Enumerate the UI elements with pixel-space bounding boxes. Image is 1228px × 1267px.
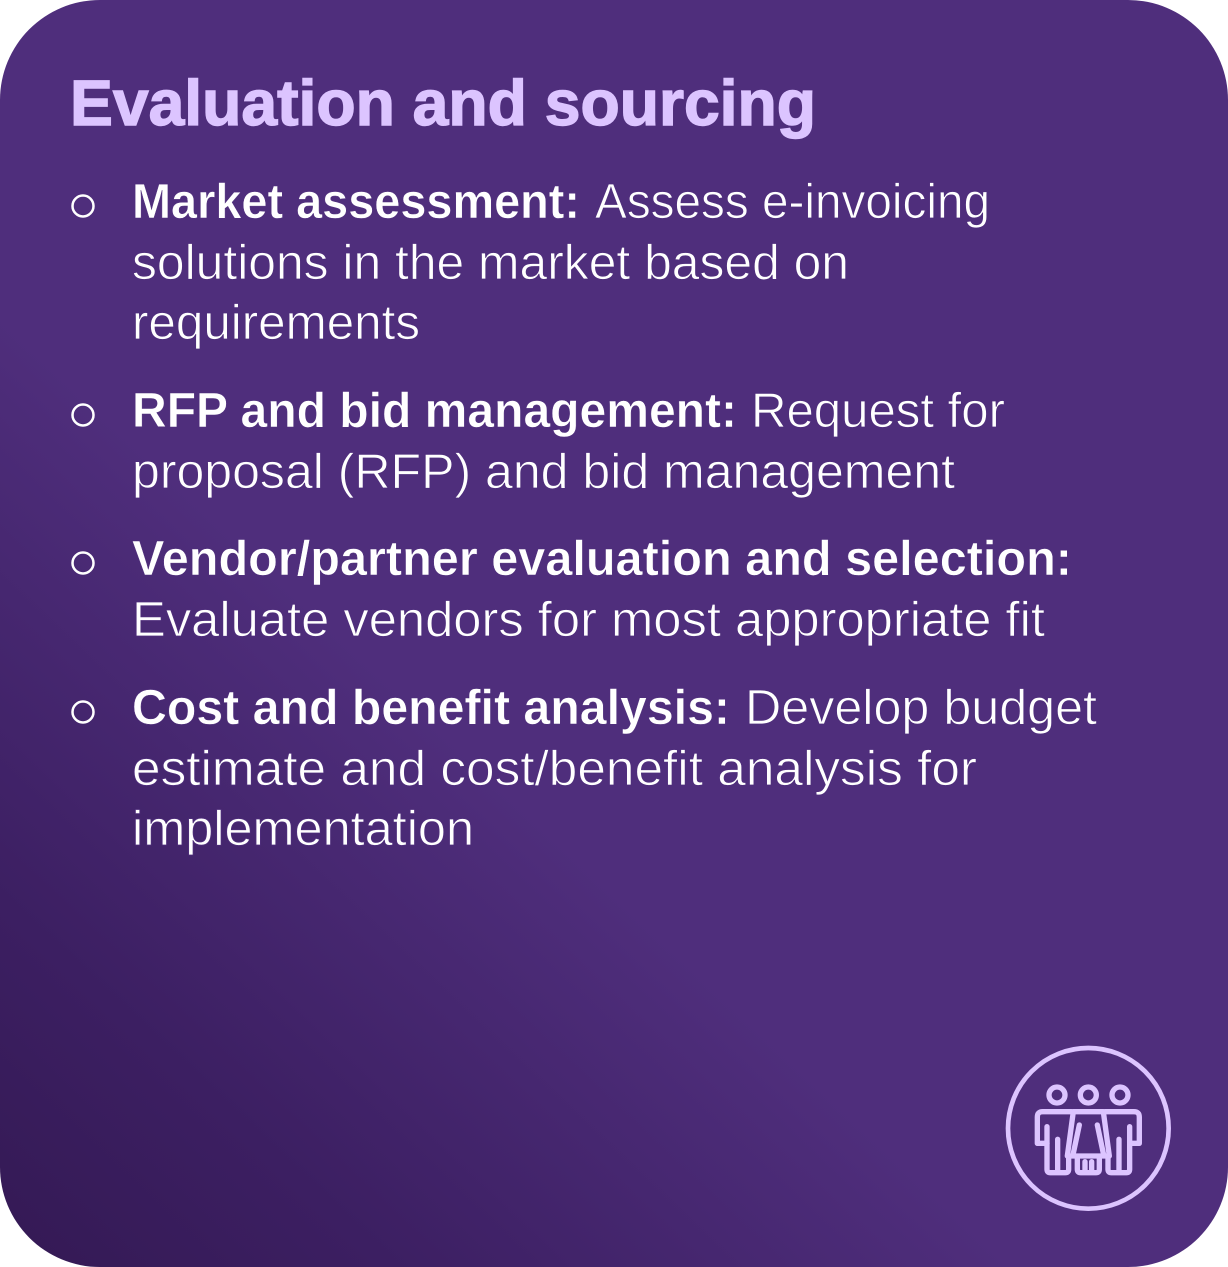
bullet item: RFP and bid management [72,384,1005,499]
bullet item: cost and benefit analysis: implementation [132,802,474,856]
bullet item: vendor/partner evaluation [72,532,1072,647]
heading: Evaluation and sourcing [70,67,816,139]
bullet item: market assessment: solutions in the market based on [132,236,849,290]
bullet item: cost and benefit analysis: estimate and cost/benefit analysis for [132,742,977,796]
bullet item: market assessment: Market assessment: [132,175,580,229]
bullet item: cost and benefit analysis: Cost and benefit analysis: [132,681,730,735]
icon: group of three people in circle [1008,1048,1169,1209]
bullet item: RFP and bid management: proposal (RFP) and bid management [132,445,955,499]
bullet item: market assessment: Assess e-invoicing [595,175,990,229]
bullet item: market assessment: requirements [132,296,420,350]
bullet item: vendor/partner evaluation: Vendor/partner evaluation and selection: [132,532,1072,586]
bullet item: RFP and bid management: Request for [751,384,1005,438]
bullet item: RFP and bid management: RFP and bid management: [132,384,737,438]
bullet item: cost and benefit analysis: Develop budget [745,681,1097,735]
bullet item: market assessment [72,175,990,350]
bullet item: vendor/partner evaluation: Evaluate vendors for most appropriate fit [132,593,1045,647]
bullet item: cost and benefit analysis [72,681,1097,856]
